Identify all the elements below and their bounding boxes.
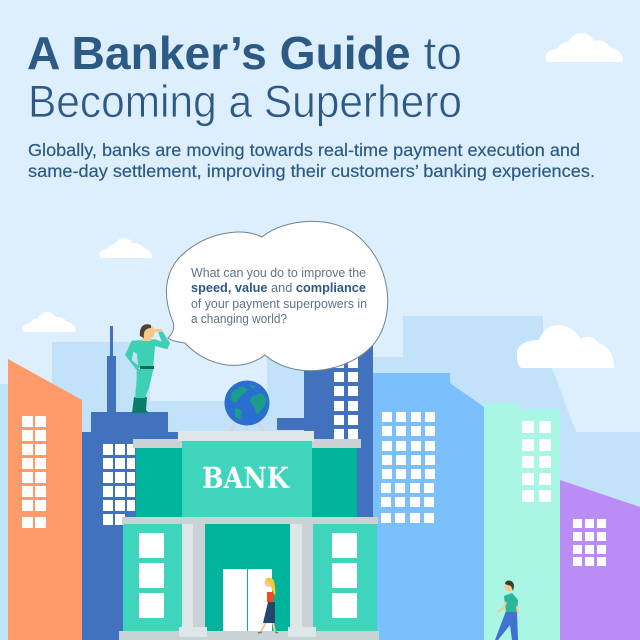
cloud: large right <box>517 325 614 368</box>
intro text: Globally, banks are moving towards real-time payment execution and <box>28 140 580 160</box>
title: A Banker’s Guide to <box>27 27 462 79</box>
bubble text: What can you do to improve the <box>191 266 366 280</box>
speech bubble <box>166 221 388 371</box>
cloud: left <box>22 312 76 332</box>
intro text <box>28 140 595 181</box>
cloud: center left <box>99 238 152 258</box>
building: purple <box>560 480 640 640</box>
bubble text: a changing world? <box>191 312 287 326</box>
bubble text: of your payment superpowers in <box>191 297 367 311</box>
cloud: top right <box>545 33 623 62</box>
bank building <box>119 380 379 640</box>
building: dark blue left <box>82 326 178 640</box>
globe <box>224 380 270 432</box>
man walking <box>495 580 518 640</box>
title: Becoming a Superhero <box>28 76 462 127</box>
building: mint <box>484 403 560 640</box>
title <box>27 27 462 127</box>
bubble text: speed, value and compliance <box>191 281 366 295</box>
building: orange <box>8 359 82 640</box>
building: light blue <box>373 373 484 640</box>
bank sign: BANK <box>202 461 291 495</box>
background skyline <box>0 316 640 640</box>
woman walking <box>258 578 278 633</box>
intro text: same-day settlement, improving their customers’ banking experiences. <box>28 161 595 181</box>
building: dark blue right <box>277 340 373 520</box>
bubble text <box>191 266 367 326</box>
superhero figure <box>125 324 170 413</box>
